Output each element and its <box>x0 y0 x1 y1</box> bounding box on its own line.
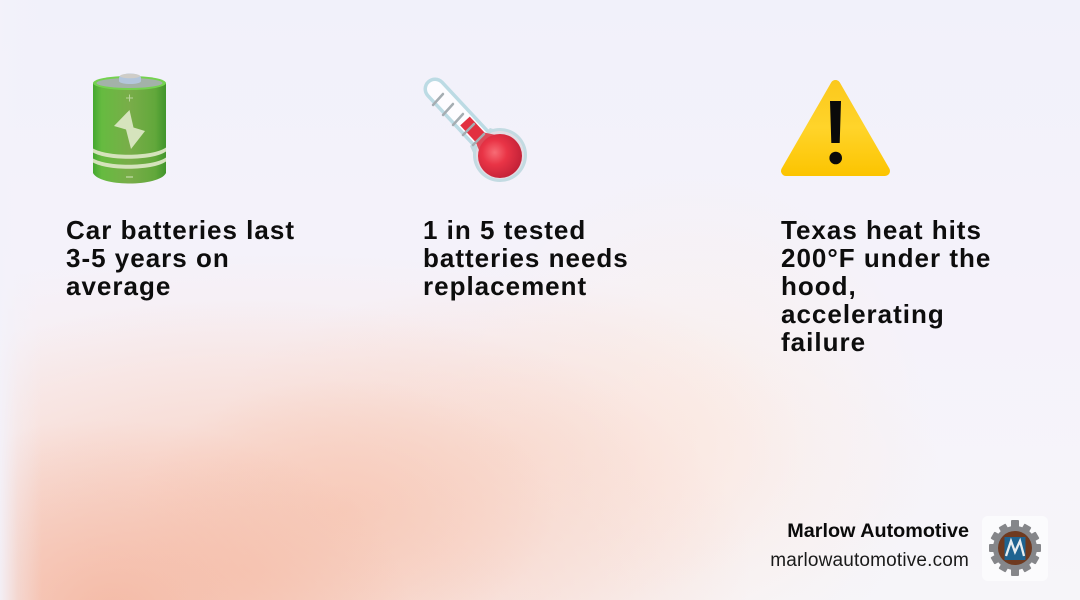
logo: Marlow Automotive gear badge <box>989 520 1041 576</box>
icon: warning triangle <box>781 80 890 176</box>
text: battery lifespan <box>66 215 295 301</box>
icon: battery <box>93 74 166 184</box>
text: replacement rate: replacement <box>423 271 587 301</box>
text: Texas heat <box>781 215 991 357</box>
text: Texas heat: hood, <box>781 271 857 301</box>
text: battery lifespan: average <box>66 271 171 301</box>
text: replacement rate <box>423 215 629 301</box>
brand website: marlowautomotive.com <box>770 550 969 571</box>
text: replacement rate: 1 in 5 tested <box>423 215 586 245</box>
text: replacement rate: batteries needs <box>423 243 629 273</box>
icon: thermometer <box>424 78 527 182</box>
text: Texas heat: 200°F under the <box>781 243 991 273</box>
text: Texas heat: failure <box>781 327 866 357</box>
text: Texas heat: Texas heat hits <box>781 215 982 245</box>
brand name: Marlow Automotive <box>787 520 969 542</box>
text: Texas heat: accelerating <box>781 299 945 329</box>
text: battery lifespan: Car batteries last <box>66 215 295 245</box>
text: battery lifespan: 3-5 years on <box>66 243 230 273</box>
